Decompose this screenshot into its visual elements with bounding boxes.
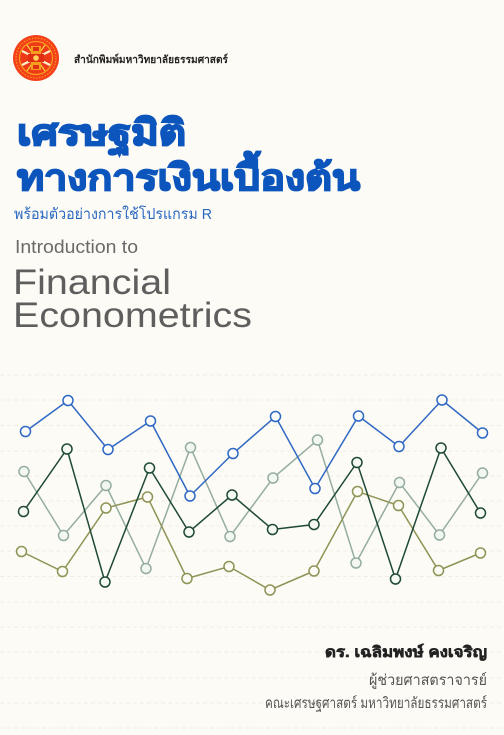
title: English bbox=[13, 236, 252, 335]
title: English: Financial bbox=[13, 262, 171, 302]
series: blue bbox=[20, 395, 488, 501]
title: Thai bbox=[17, 112, 360, 198]
series: dark green bbox=[18, 443, 486, 587]
line chart bbox=[16, 395, 488, 595]
author name: ดร. เฉลิมพงษ์ คงเจริญ bbox=[325, 643, 487, 661]
title: English: Econometrics bbox=[13, 295, 252, 335]
series: grey green bbox=[19, 435, 488, 574]
author position: ผู้ช่วยศาสตราจารย์ bbox=[369, 672, 487, 689]
publisher name: สำนักพิมพ์มหาวิทยาลัยธรรมศาสตร์ bbox=[74, 53, 228, 66]
title: Thai: เศรษฐมิติ bbox=[17, 112, 186, 156]
title: English: Introduction to bbox=[15, 236, 138, 257]
series: olive bbox=[16, 486, 486, 595]
subtitle: Thai: พร้อมตัวอย่างการใช้โปรแกรม R bbox=[14, 205, 212, 223]
title: Thai: ทางการเงินเบื้องต้น bbox=[17, 151, 360, 198]
icon: university seal bbox=[13, 35, 59, 81]
